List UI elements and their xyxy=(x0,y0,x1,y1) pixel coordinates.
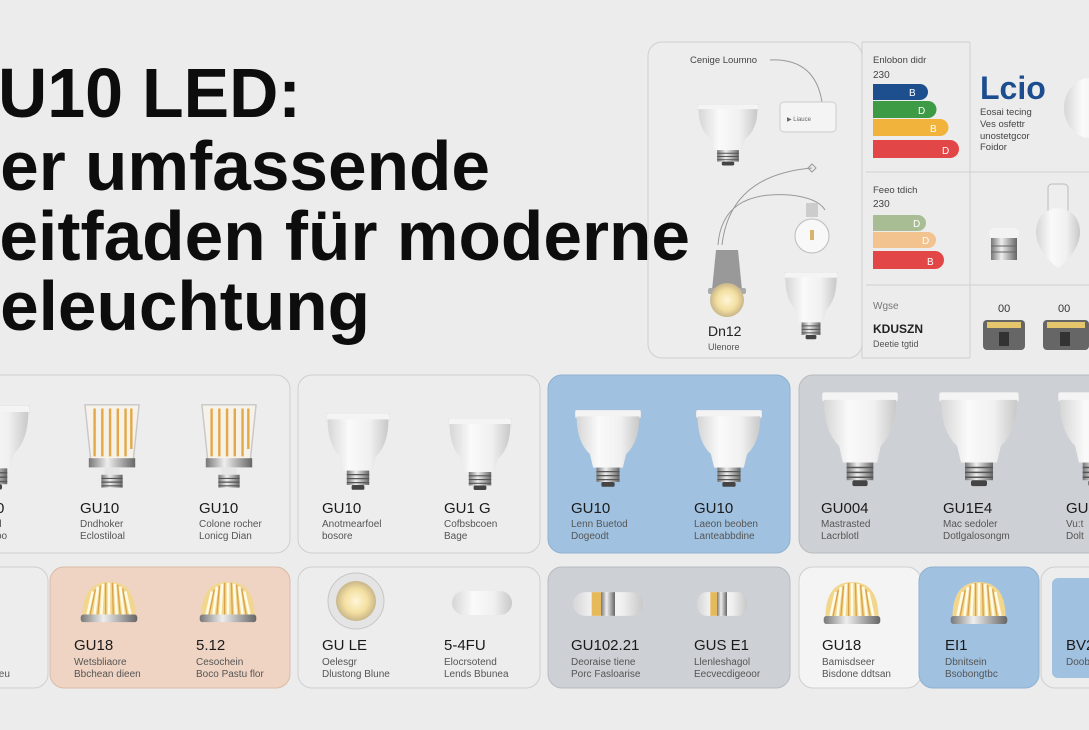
energy label 2: D xyxy=(922,236,929,247)
card: blue dome xyxy=(919,567,1039,688)
title xyxy=(0,54,690,345)
panel: bulb diagram xyxy=(648,42,862,358)
card: grey capsules xyxy=(548,567,790,688)
card: grey large bulbs: Lacrblotl xyxy=(821,531,859,542)
panel: energy labels xyxy=(862,42,1089,358)
energy label 2: Feeo tdich xyxy=(873,185,917,196)
brand logo: Lcio xyxy=(980,70,1046,106)
energy label 2 xyxy=(873,185,944,269)
icon: frosted bulb xyxy=(1036,184,1080,268)
card: grey large bulbs: Dolt xyxy=(1066,531,1084,542)
icon: GU10 cylinder xyxy=(989,228,1019,260)
card: grey large bulbs: GU004 xyxy=(821,500,869,517)
card: grey capsules: Llenleshagol xyxy=(694,657,750,668)
card: peach domes: Bbchean dieen xyxy=(74,669,141,680)
card: partial left row 2 xyxy=(0,567,48,688)
card: peach domes: GU18 xyxy=(74,637,113,654)
card: blue reflectors xyxy=(548,375,790,553)
energy label 1: B xyxy=(909,88,916,99)
card: peach domes: Cesochein xyxy=(196,657,243,668)
energy label 2: 230 xyxy=(873,199,890,210)
card: filament bulbs xyxy=(0,375,290,553)
card: grey large bulbs: Dotlgalosongm xyxy=(943,531,1010,542)
card: filament bulbs: Eclostiloal xyxy=(80,531,125,542)
card: white dome xyxy=(799,567,921,688)
card: disc and capsule: Lends Bbunea xyxy=(444,669,509,680)
energy label 2: D xyxy=(913,219,920,230)
card: disc and capsule: GU LE xyxy=(322,637,367,654)
card: white dome: GU18 xyxy=(822,637,861,654)
icon: frosted bulb top xyxy=(1064,78,1089,138)
energy label 1 xyxy=(873,55,959,158)
card: disc and capsule: 5-4FU xyxy=(444,637,486,654)
diagram caption: Dn12 xyxy=(708,323,742,339)
icon: driver box xyxy=(780,102,836,132)
card: grey large bulbs: GU1E4 xyxy=(943,500,992,517)
diagram label: Cenige Loumno xyxy=(690,55,757,66)
energy label 1: D xyxy=(942,146,949,157)
card: disc and capsule xyxy=(298,567,540,688)
card: grey large bulbs xyxy=(799,375,1089,553)
card: filament bulbs: GU10 xyxy=(199,500,238,517)
card: peach domes: Boco Pastu flor xyxy=(196,669,264,680)
icon: reflector bulb xyxy=(697,104,759,165)
card: blue reflectors: Dogeodt xyxy=(571,531,609,542)
card: grey capsules: GU102.21 xyxy=(571,637,639,654)
card: white dome: Bamisdseer xyxy=(822,657,875,668)
card: blue reflectors: Lanteabbdine xyxy=(694,531,755,542)
card: grey capsules: Porc Fasloarise xyxy=(571,669,641,680)
card: disc and capsule: Oelesgr xyxy=(322,657,358,668)
card: blue reflectors: Lenn Buetod xyxy=(571,519,628,530)
card: peach domes: Wetsbliaore xyxy=(74,657,127,668)
card: grey large bulbs: Mac sedoler xyxy=(943,519,998,530)
card: white reflectors: GU10 xyxy=(322,500,361,517)
brand text: Eosai tecing xyxy=(980,107,1032,118)
icon: reflector bulb 2 xyxy=(784,272,838,339)
card: white reflectors: GU1 G xyxy=(444,500,491,517)
icon: chips xyxy=(983,303,1089,350)
brand text: Foidor xyxy=(980,142,1007,153)
card: white reflectors: bosore xyxy=(322,531,353,542)
card: white dome: Bisdone ddtsan xyxy=(822,669,891,680)
card: filament bulbs: Colone rocher xyxy=(199,519,262,530)
icon: chips: 00 xyxy=(998,303,1010,315)
card: disc and capsule: Dlustong Blune xyxy=(322,669,390,680)
spec text: KDUSZN xyxy=(873,322,923,336)
card: grey capsules: Deoraise tiene xyxy=(571,657,636,668)
card: grey large bulbs: Vu:t xyxy=(1066,519,1084,530)
card: partial right xyxy=(1041,567,1089,688)
panel: brand info xyxy=(980,70,1089,350)
card: blue reflectors: GU10 xyxy=(694,500,733,517)
card: white reflectors: Bage xyxy=(444,531,468,542)
card: blue dome: Bsobongtbc xyxy=(945,669,998,680)
brand text: unostetgcor xyxy=(980,131,1030,142)
card: blue reflectors: Laeon beoben xyxy=(694,519,758,530)
card: white reflectors: Anotmearfoel xyxy=(322,519,381,530)
spec text: Deetie tgtid xyxy=(873,339,919,349)
card: filament bulbs: Dndhoker xyxy=(80,519,124,530)
card: filament bulbs: Lonicg Dian xyxy=(199,531,252,542)
diagram caption xyxy=(708,323,742,352)
card: blue reflectors: GU10 xyxy=(571,500,610,517)
icon: driver box: ▶ Liauce xyxy=(787,117,812,123)
card: white reflectors: Cofbsbcoen xyxy=(444,519,497,530)
card: grey large bulbs: GU xyxy=(1066,500,1088,517)
icon: pendant lamp xyxy=(708,250,746,317)
energy label 1: Enlobon didr xyxy=(873,55,926,66)
card: grey large bulbs: Mastrasted xyxy=(821,519,870,530)
energy label 2: B xyxy=(927,257,934,268)
icon: clear bulb xyxy=(795,203,829,253)
card: filament bulbs: GU10 xyxy=(80,500,119,517)
energy label 1: B xyxy=(930,124,937,135)
diagram caption: Ulenore xyxy=(708,342,740,352)
card: peach domes xyxy=(50,567,290,688)
card: white reflectors xyxy=(298,375,540,553)
card: disc and capsule: Elocrsotend xyxy=(444,657,497,668)
icon: chips: 00 xyxy=(1058,303,1070,315)
card: peach domes: 5.12 xyxy=(196,637,225,654)
spec text xyxy=(873,301,923,349)
card: blue dome: EI1 xyxy=(945,637,968,654)
brand text: Ves osfettr xyxy=(980,119,1025,130)
energy label 1: 230 xyxy=(873,70,890,81)
card: grey capsules: Eecvecdigeoor xyxy=(694,669,761,680)
brand text xyxy=(980,107,1032,153)
spec text: Wgse xyxy=(873,301,899,312)
energy label 1: D xyxy=(918,106,925,117)
card: blue dome: Dbnitsein xyxy=(945,657,987,668)
card: grey capsules: GUS E1 xyxy=(694,637,749,654)
